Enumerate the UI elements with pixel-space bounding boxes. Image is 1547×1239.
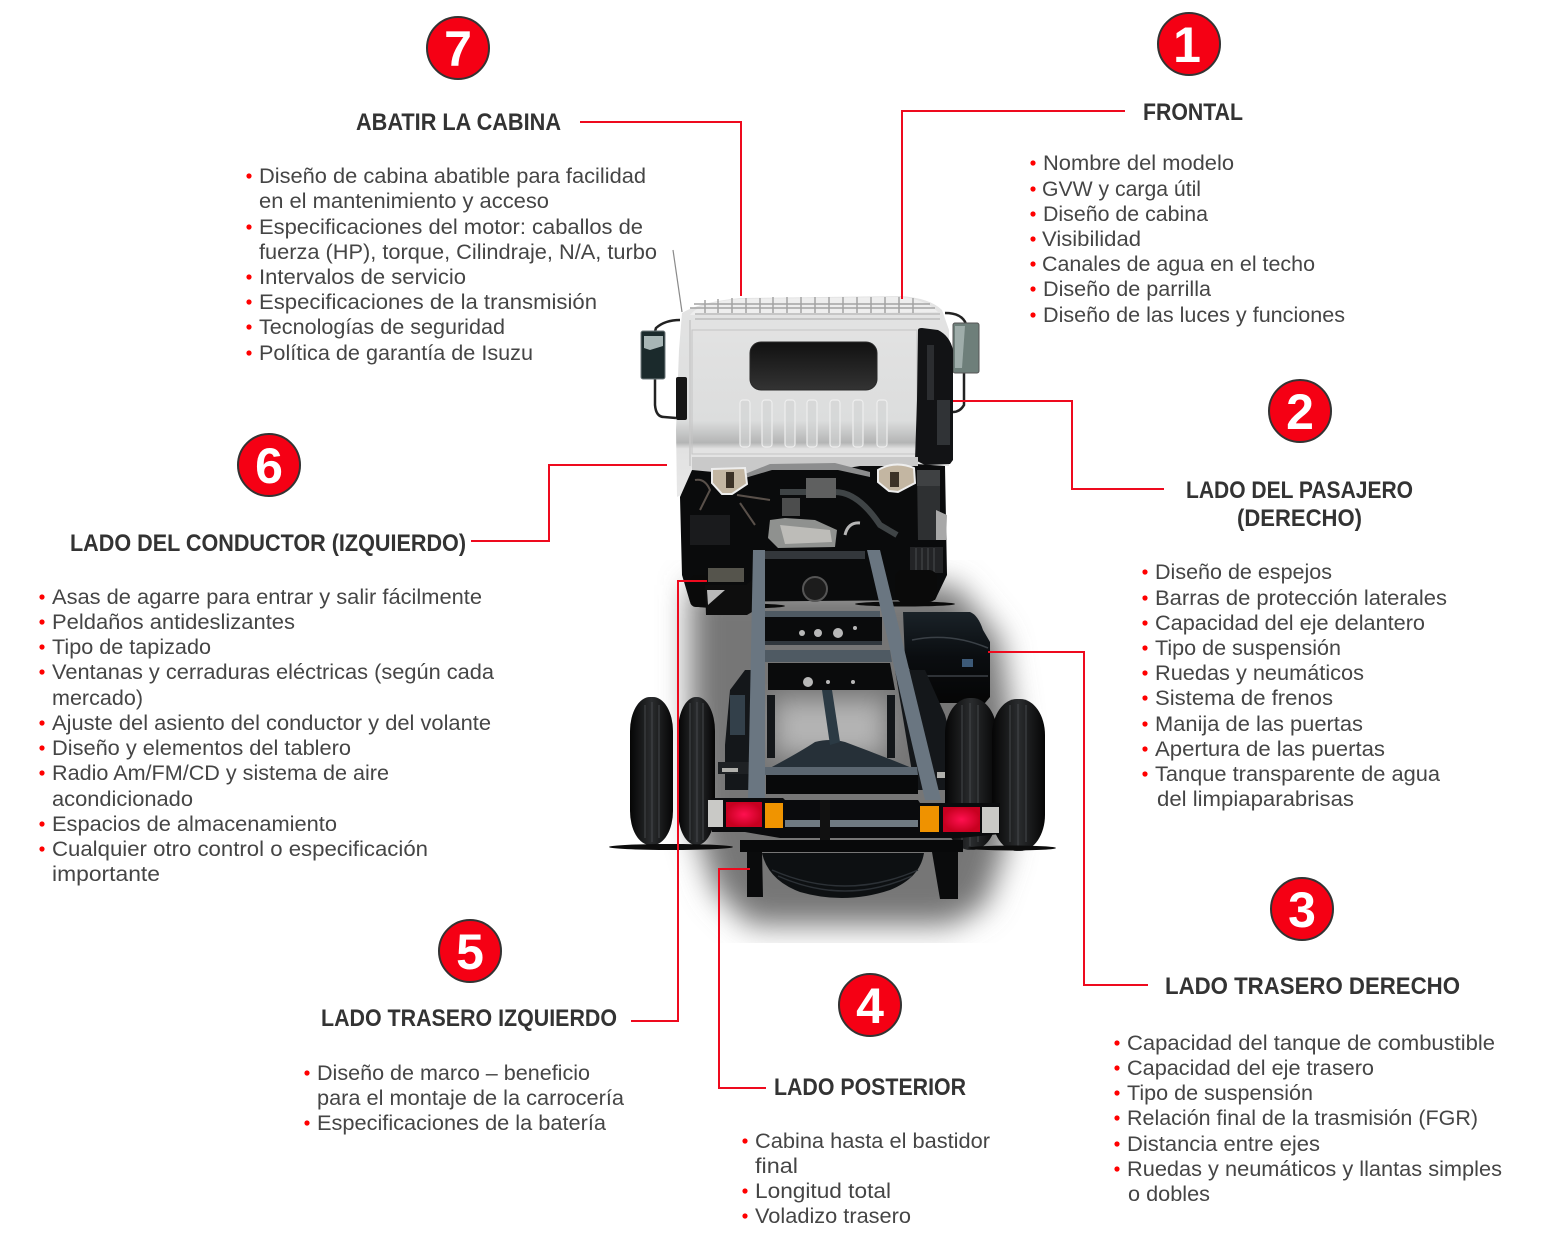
leader line: frontal (902, 111, 1125, 299)
tires (609, 697, 1056, 851)
list: frontal: Diseño de parrilla (1043, 278, 1211, 301)
list: lado del conductor: Ventanas y cerraduras eléctricas (según cada (52, 661, 494, 684)
badge 4: 4 (856, 978, 884, 1034)
list: lado del pasajero: Capacidad del eje delantero (1155, 612, 1425, 635)
rear axle (766, 690, 918, 794)
list: lado del conductor: Tipo de tapizado (52, 636, 211, 659)
list: lado del pasajero: del limpiaparabrisas (1157, 788, 1354, 811)
front bracket (705, 568, 752, 615)
ground shadow (690, 585, 1012, 925)
left headlight (712, 468, 747, 494)
list: lado del conductor: Diseño y elementos del tablero (52, 737, 351, 760)
heading: lado del pasajero: (DERECHO) (1237, 505, 1362, 532)
panel: frontal (1030, 13, 1345, 327)
list: lado trasero izquierdo: Diseño de marco – beneficio (317, 1062, 590, 1085)
list: lado trasero derecho: Distancia entre ejes (1127, 1133, 1320, 1156)
badge 3: 3 (1288, 882, 1316, 938)
list: lado trasero derecho: Relación final de la trasmisión (FGR) (1127, 1107, 1478, 1130)
list: lado trasero derecho: o dobles (1128, 1183, 1210, 1206)
list: frontal: Diseño de las luces y funciones (1043, 304, 1345, 327)
badge 3 (1271, 878, 1333, 940)
list: lado del conductor: importante (52, 863, 160, 886)
list: lado del pasajero: Barras de protección laterales (1155, 587, 1447, 610)
list: lado del pasajero: Ruedas y neumáticos (1155, 662, 1364, 685)
list: lado posterior (742, 1130, 990, 1228)
panel: lado trasero izquierdo (304, 920, 624, 1135)
list: lado trasero derecho (1114, 1032, 1502, 1206)
panel: lado posterior (742, 974, 990, 1228)
list: lado del pasajero: Apertura de las puertas (1155, 738, 1385, 761)
heading: lado trasero izquierdo: LADO TRASERO IZQUIERDO (321, 1005, 617, 1032)
right black pillar (915, 328, 953, 465)
badge 6 (238, 434, 300, 496)
badge 7: 7 (444, 21, 472, 77)
badge 5: 5 (456, 924, 484, 980)
leader line: lado trasero izquierdo (631, 581, 707, 1021)
list: lado trasero izquierdo (304, 1062, 624, 1135)
list: frontal: Diseño de cabina (1043, 203, 1208, 226)
truck chassis illustration (609, 250, 1056, 925)
list: frontal: GVW y carga útil (1042, 178, 1201, 201)
right headlight (878, 464, 915, 492)
leader line: lado trasero derecho (988, 652, 1148, 985)
frame cross members (765, 611, 918, 775)
list: abatir la cabina: Intervalos de servicio (259, 266, 466, 289)
panel: abatir la cabina (246, 17, 657, 365)
list: lado posterior: final (755, 1155, 798, 1178)
panel: lado del pasajero (1142, 380, 1447, 811)
list: lado trasero derecho: Capacidad del tanque de combustible (1127, 1032, 1495, 1055)
leader line: abatir la cabina (580, 122, 741, 296)
list: lado trasero derecho: Ruedas y neumáticos y llantas simples (1127, 1158, 1502, 1181)
frame rails (748, 550, 941, 800)
list: lado posterior: Voladizo trasero (755, 1205, 911, 1228)
fuel tank (903, 612, 990, 703)
heading: lado del pasajero: LADO DEL PASAJERO (1186, 477, 1413, 504)
list: frontal: Nombre del modelo (1043, 152, 1234, 175)
list: lado del pasajero: Manija de las puertas (1155, 713, 1363, 736)
heading: abatir la cabina: ABATIR LA CABINA (356, 109, 561, 136)
list: lado del conductor: Radio Am/FM/CD y sistema de aire (52, 762, 389, 785)
leader line: lado posterior (719, 869, 766, 1088)
list: lado del conductor: mercado) (52, 687, 143, 710)
list: frontal: Visibilidad (1042, 228, 1141, 251)
badge 1: 1 (1173, 17, 1201, 73)
list: lado del pasajero: Diseño de espejos (1155, 561, 1332, 584)
heading: frontal: FRONTAL (1143, 99, 1243, 126)
list: abatir la cabina: fuerza (HP), torque, Cilindraje, N/A, turbo (259, 241, 657, 264)
list: lado posterior: Cabina hasta el bastidor (755, 1130, 990, 1153)
cab rear ribs (740, 400, 887, 447)
spare tire (762, 853, 924, 898)
rear suspension (718, 670, 960, 790)
list: lado trasero izquierdo: para el montaje de la carrocería (317, 1087, 624, 1110)
list: lado trasero derecho: Tipo de suspensión (1127, 1082, 1313, 1105)
list: lado del pasajero: Tanque transparente de agua (1155, 763, 1440, 786)
heading: lado del pasajero (1186, 477, 1413, 532)
list: abatir la cabina: Política de garantía de Isuzu (259, 342, 533, 365)
heading: lado del conductor: LADO DEL CONDUCTOR (IZQUIERDO) (70, 530, 466, 557)
list: frontal (1030, 152, 1345, 327)
rear legs (747, 850, 958, 899)
panel: lado del conductor (39, 434, 494, 886)
badge 1 (1158, 13, 1220, 75)
list: abatir la cabina: Especificaciones del motor: caballos de (259, 216, 643, 239)
list: abatir la cabina (246, 165, 657, 365)
heading: lado trasero derecho: LADO TRASERO DERECHO (1165, 973, 1460, 1000)
list: lado del pasajero: Sistema de frenos (1155, 687, 1333, 710)
heading: lado posterior: LADO POSTERIOR (774, 1074, 966, 1101)
leader line: lado del pasajero (953, 401, 1164, 489)
list: lado posterior: Longitud total (755, 1180, 891, 1203)
list: lado del pasajero: Tipo de suspensión (1155, 637, 1341, 660)
badge 2 (1269, 380, 1331, 442)
badge 7 (427, 17, 489, 79)
engine bay (680, 457, 947, 602)
list: abatir la cabina: Tecnologías de seguridad (259, 316, 505, 339)
badge 5 (439, 920, 501, 982)
right mirror (945, 313, 979, 412)
list: lado del conductor (39, 586, 494, 886)
list: lado trasero izquierdo: Especificaciones de la batería (317, 1112, 606, 1135)
front wheels (690, 570, 955, 608)
list: abatir la cabina: Especificaciones de la transmisión (259, 291, 597, 314)
list: lado del conductor: Espacios de almacenamiento (52, 813, 337, 836)
badge 2: 2 (1286, 384, 1314, 440)
list: lado del conductor: Peldaños antideslizantes (52, 611, 295, 634)
badge 4 (839, 974, 901, 1036)
list: lado del conductor: Asas de agarre para entrar y salir fácilmente (52, 586, 482, 609)
antenna (673, 250, 682, 312)
list: frontal: Canales de agua en el techo (1042, 253, 1315, 276)
list: lado del conductor: acondicionado (52, 788, 193, 811)
cab body (676, 296, 949, 497)
list: lado del conductor: Cualquier otro control o especificación (52, 838, 428, 861)
list: abatir la cabina: Diseño de cabina abatible para facilidad (259, 165, 646, 188)
left grab handle (676, 377, 687, 420)
list: lado del conductor: Ajuste del asiento del conductor y del volante (52, 712, 491, 735)
list: lado del pasajero (1142, 561, 1447, 811)
list: lado trasero derecho: Capacidad del eje trasero (1127, 1057, 1374, 1080)
badge 6: 6 (255, 438, 283, 494)
leader line: lado del conductor (471, 465, 667, 541)
rear window (750, 342, 877, 390)
list: abatir la cabina: en el mantenimiento y acceso (259, 190, 549, 213)
left mirror (641, 320, 680, 418)
panel: lado trasero derecho (1114, 878, 1502, 1206)
rear bumper and lights (708, 798, 1000, 852)
